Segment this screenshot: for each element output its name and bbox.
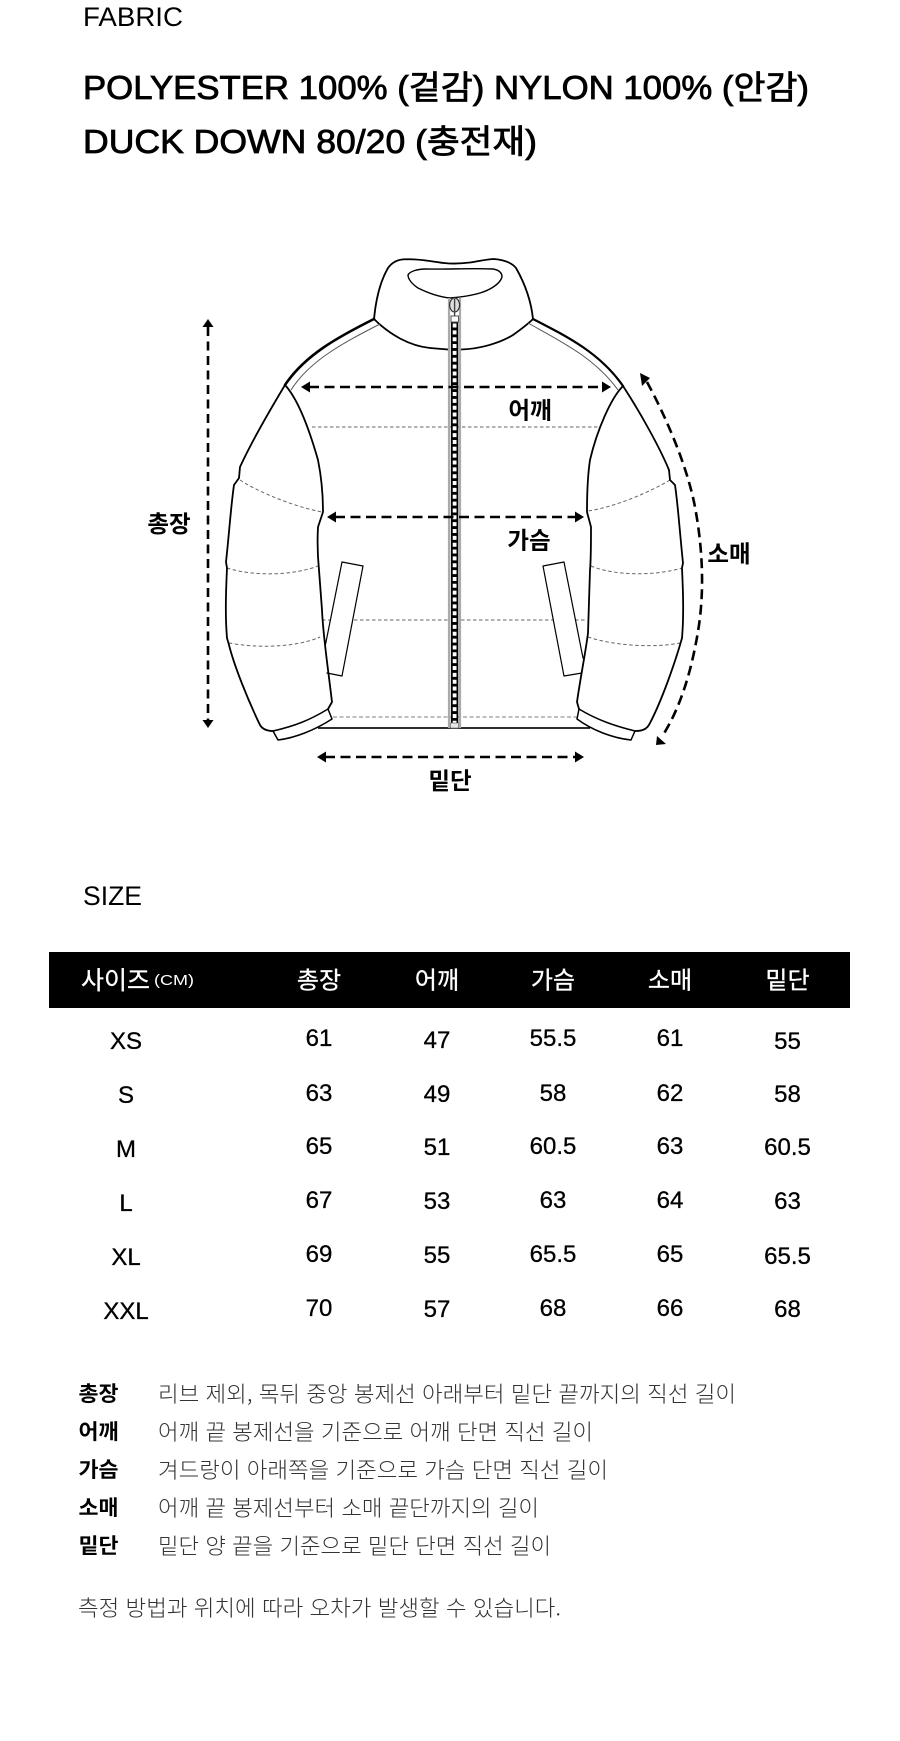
row L [119, 1187, 801, 1217]
measurement notes: 어깨 [78, 1416, 118, 1446]
row XL: 69 [306, 1241, 332, 1268]
row L: 63 [540, 1187, 566, 1214]
row XS: XS [110, 1028, 142, 1055]
row XS: 47 [424, 1027, 450, 1054]
row S: 58 [774, 1081, 801, 1108]
table header: 밑단 [765, 960, 810, 996]
label: shoulder: 어깨 [508, 392, 552, 426]
fabric composition: DUCK DOWN 80/20 (충전재) [83, 123, 537, 160]
row XL: 65.5 [530, 1241, 576, 1268]
disclaimer: 측정 방법과 위치에 따라 오차가 발생할 수 있습니다. [78, 1591, 561, 1623]
measurement notes: 밑단 양 끝을 기준으로 밑단 단면 직선 길이 [158, 1529, 551, 1561]
size heading: SIZE [83, 881, 142, 911]
table header: 소매 [648, 960, 692, 996]
row XXL [103, 1295, 801, 1325]
fabric heading: FABRIC [83, 2, 183, 32]
table header: 어깨 [415, 960, 459, 996]
quilting seams [227, 427, 682, 717]
row XS: 55 [774, 1028, 801, 1055]
measurement notes: 가슴 [78, 1454, 118, 1484]
row L: 53 [424, 1188, 450, 1215]
row XL: 55 [424, 1242, 450, 1269]
row XS: 55.5 [530, 1025, 576, 1052]
label: total length: 총장 [147, 505, 191, 539]
row S: 63 [306, 1080, 332, 1107]
table header: 가슴 [531, 960, 575, 996]
row XL: 65.5 [764, 1243, 811, 1270]
arrow: chest [327, 512, 584, 522]
row L: L [119, 1190, 133, 1217]
row S: 58 [540, 1080, 566, 1107]
measurement notes [78, 1377, 736, 1561]
row XXL: 70 [306, 1295, 332, 1322]
measurement notes: 소매 [78, 1492, 118, 1522]
row M: 51 [424, 1134, 450, 1161]
table header: 사이즈 [81, 961, 150, 997]
jacket diagram [226, 259, 683, 740]
row XL: XL [111, 1244, 141, 1271]
row M: M [116, 1136, 136, 1163]
row S: 49 [424, 1081, 450, 1108]
row XS: 61 [657, 1025, 683, 1052]
arrow: total length [202, 319, 214, 728]
size table [49, 952, 850, 1325]
row M: 60.5 [764, 1134, 811, 1161]
row S [118, 1080, 801, 1109]
row M [116, 1133, 811, 1163]
row XS: 61 [306, 1025, 332, 1052]
arrow: sleeve [640, 373, 702, 745]
row XXL: 57 [424, 1296, 450, 1323]
label: sleeve: 소매 [707, 535, 751, 569]
measurement notes: 밑단 [78, 1530, 118, 1560]
row L: 64 [657, 1187, 683, 1214]
fabric composition: POLYESTER 100% (겉감) NYLON 100% (안감) [83, 69, 809, 106]
table header: (CM) [154, 972, 194, 989]
row XXL: XXL [103, 1298, 149, 1325]
fabric composition [83, 69, 809, 160]
measurement notes: 리브 제외, 목뒤 중앙 봉제선 아래부터 밑단 끝까지의 직선 길이 [158, 1377, 736, 1409]
pockets [325, 562, 583, 676]
arrow: hem [317, 752, 584, 762]
row XXL: 66 [657, 1295, 683, 1322]
row XXL: 68 [540, 1295, 566, 1322]
measurement notes: 총장 [78, 1378, 118, 1408]
table header [49, 952, 850, 1008]
row M: 65 [306, 1133, 332, 1160]
row XXL: 68 [774, 1296, 801, 1323]
zipper [449, 298, 460, 728]
measurement notes: 어깨 끝 봉제선부터 소매 끝단까지의 길이 [158, 1491, 539, 1523]
row M: 63 [657, 1133, 683, 1160]
label: hem: 밑단 [428, 762, 472, 796]
row L: 63 [774, 1188, 801, 1215]
row XL: 65 [657, 1241, 683, 1268]
arrow: shoulder [301, 382, 611, 392]
row S: 62 [657, 1080, 683, 1107]
label: chest: 가슴 [507, 522, 551, 556]
right sleeve [577, 386, 683, 740]
left sleeve [226, 385, 332, 740]
table header: 총장 [297, 960, 341, 996]
row XL [111, 1241, 811, 1271]
measurement notes: 겨드랑이 아래쪽을 기준으로 가슴 단면 직선 길이 [158, 1453, 608, 1485]
row XS [110, 1025, 801, 1055]
measurement notes: 어깨 끝 봉제선을 기준으로 어깨 단면 직선 길이 [158, 1415, 593, 1447]
row M: 60.5 [530, 1133, 576, 1160]
row S: S [118, 1082, 134, 1109]
row L: 67 [306, 1187, 332, 1214]
jacket body and collar outline [285, 259, 623, 728]
